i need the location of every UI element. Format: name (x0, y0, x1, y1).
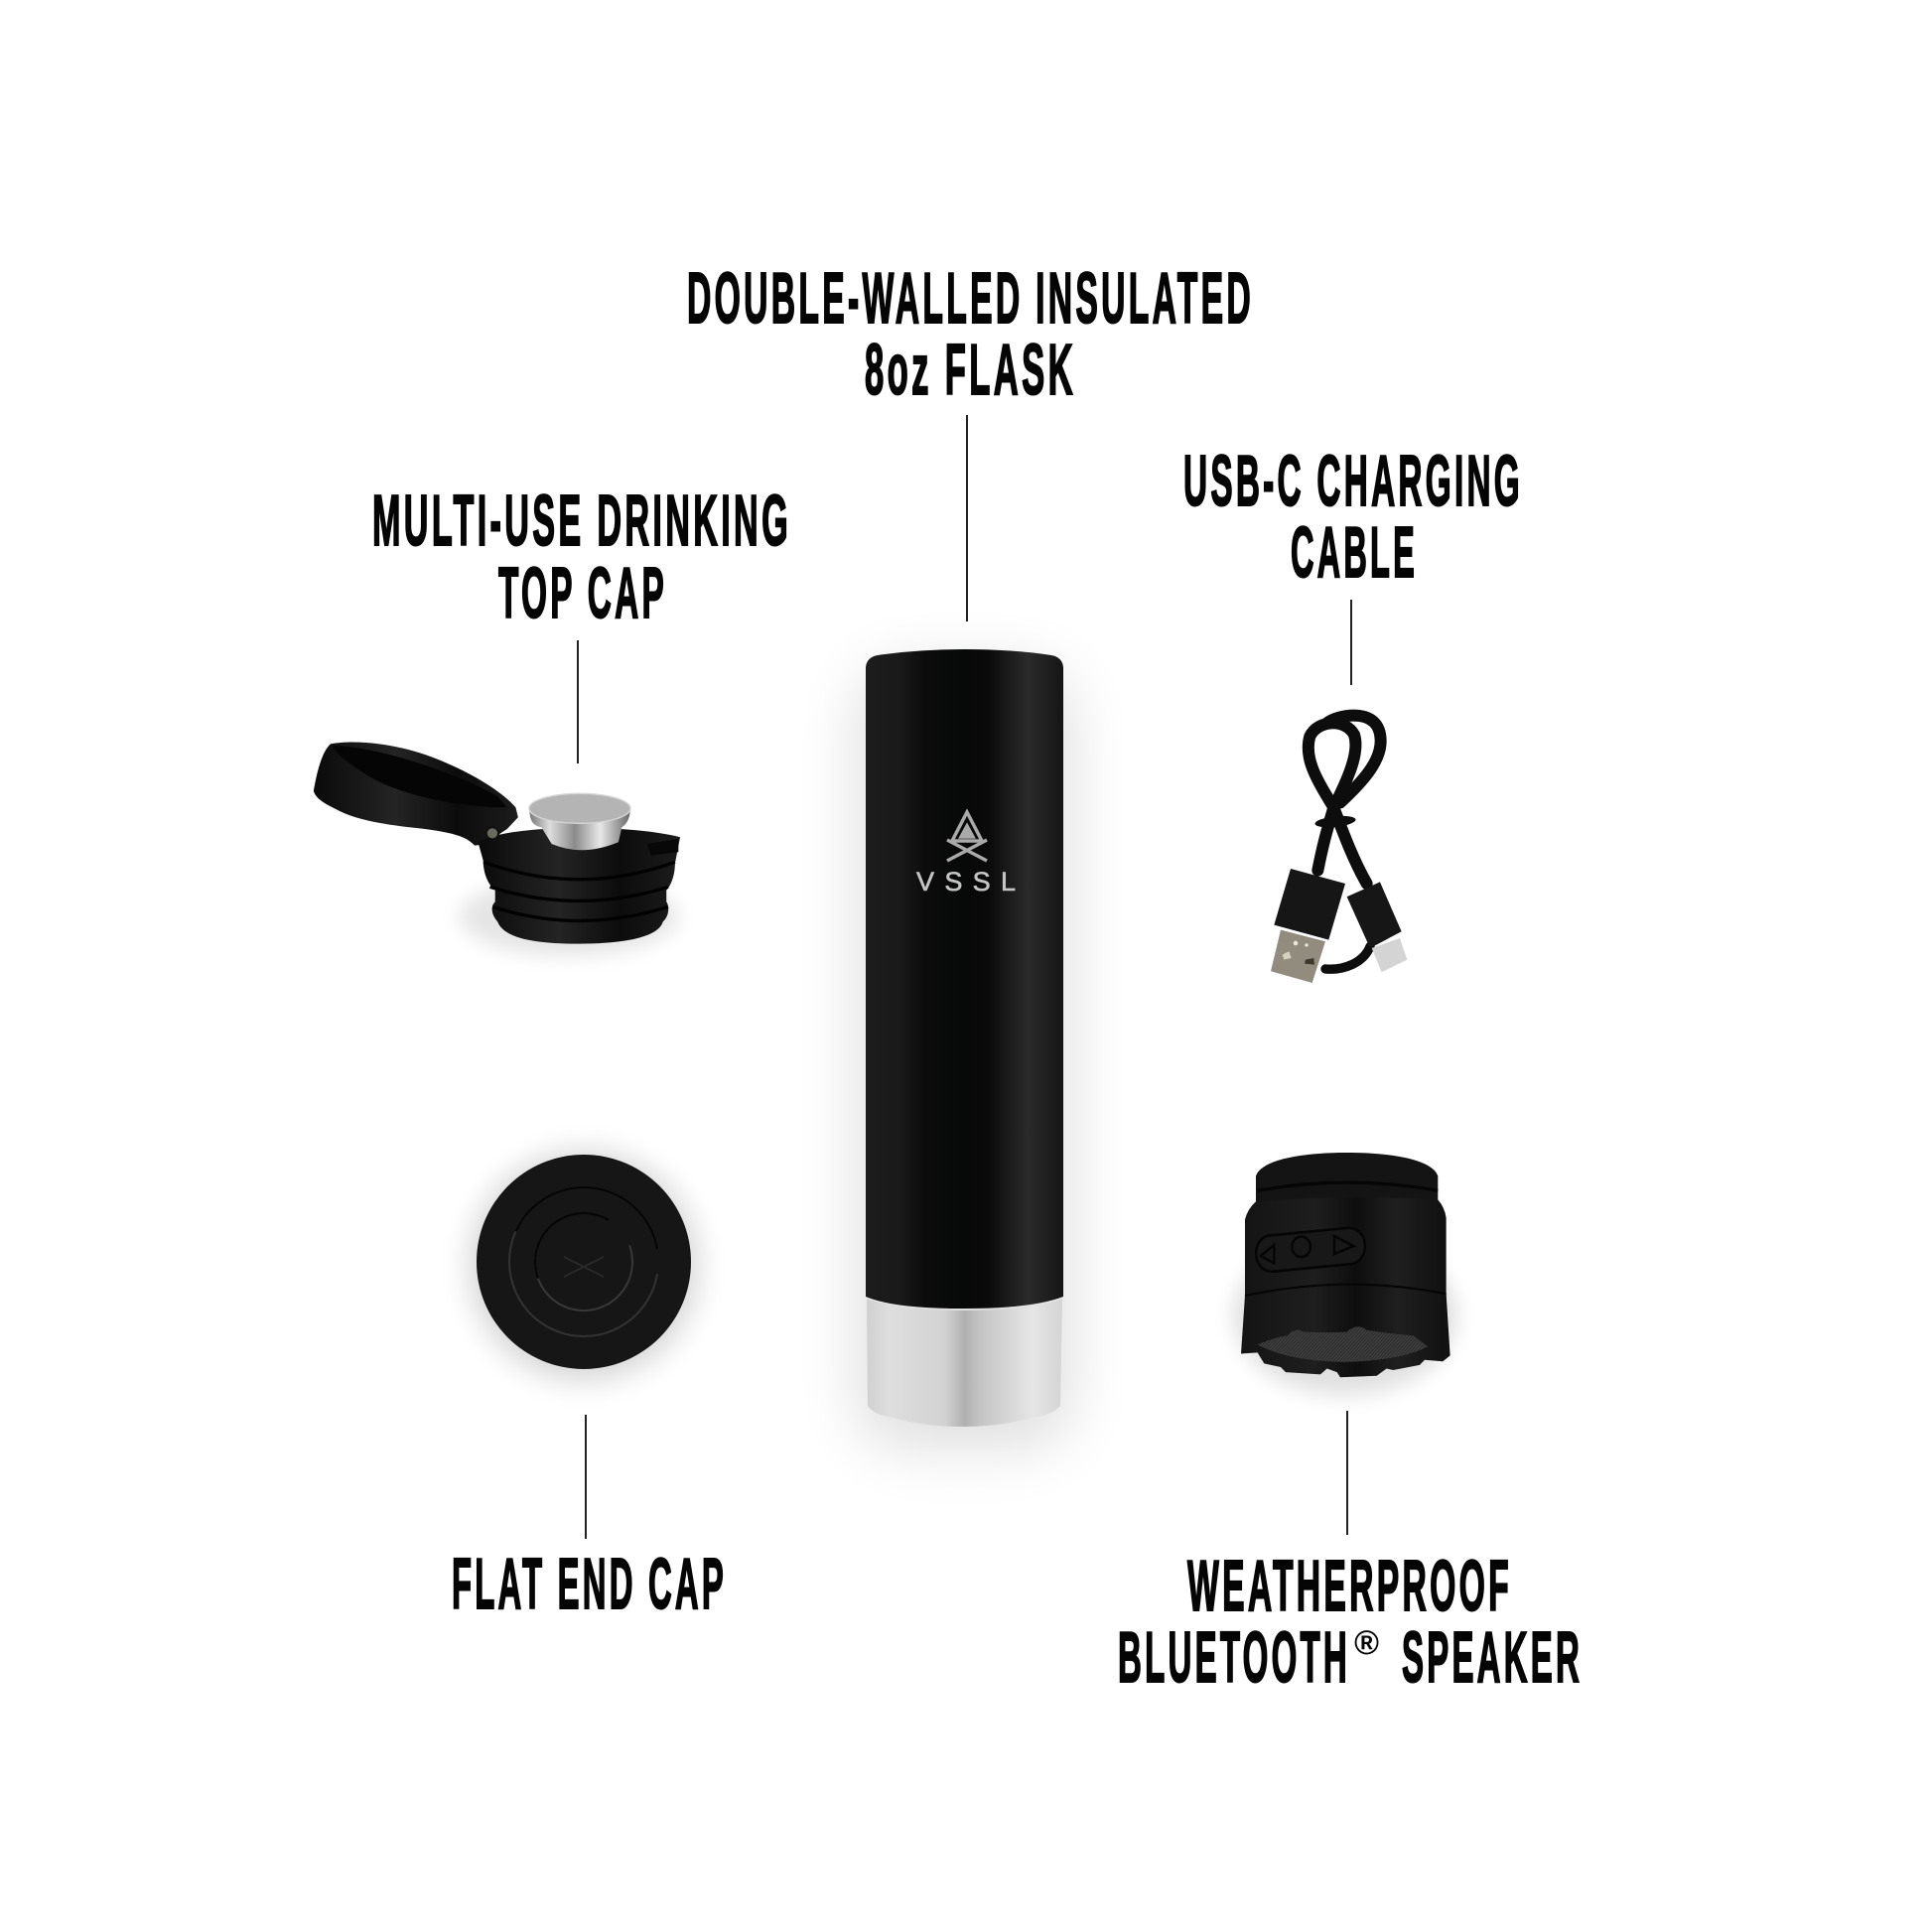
flask silver base (867, 1299, 1062, 1427)
text: FLAT END CAP (452, 1545, 727, 1624)
open lid (314, 742, 518, 846)
band seam (1245, 1285, 1447, 1296)
text: USB-C CHARGING (1183, 442, 1523, 521)
USB-A metal (1271, 930, 1325, 983)
label: multi-use drinking top cap (372, 482, 791, 633)
leader line: speaker (1346, 1411, 1348, 1535)
logo flame mark (947, 812, 987, 861)
VSSL logo (916, 812, 1016, 897)
collar groove (1258, 1182, 1438, 1190)
end cap rings (484, 1163, 683, 1361)
speaker grille (1258, 1326, 1428, 1362)
speaker lower band (1241, 1285, 1450, 1377)
leader line: end cap (585, 1415, 587, 1539)
speaker button panel (1255, 1226, 1366, 1273)
label: weatherproof bluetooth speaker: WEATHERPROOF (1187, 1547, 1512, 1626)
USB-A boot (1274, 869, 1345, 940)
product: flat end cap (469, 1151, 699, 1381)
label: weatherproof bluetooth speaker: ® (1354, 1624, 1379, 1662)
latch tab (647, 839, 678, 856)
base ridges (483, 862, 675, 920)
lid opening (333, 747, 507, 807)
label: double-walled insulated 8oz flask: 8oz FLASK (865, 331, 1076, 410)
USB-C boot (1347, 882, 1402, 948)
speaker shadow (1233, 1236, 1457, 1396)
product: USB-C cable (1271, 716, 1407, 983)
hinge pin (486, 827, 498, 839)
cap shadow (459, 877, 678, 956)
label: USB-C charging cable: CABLE (1291, 513, 1418, 593)
USB-A contacts (1283, 941, 1314, 965)
silver button (529, 807, 630, 850)
text: MULTI-USE DRINKING (372, 482, 791, 561)
label: weatherproof bluetooth speaker: BLUETOOTH (1118, 1618, 1350, 1698)
product: bluetooth speaker (1233, 1153, 1457, 1396)
product: drinking top cap (314, 742, 680, 956)
leader line: top cap (577, 640, 579, 763)
end cap shadow (469, 1151, 699, 1381)
USB-C metal (1372, 938, 1407, 972)
threaded base (478, 828, 680, 944)
label: double-walled insulated 8oz flask (687, 259, 1254, 410)
cable wire (1309, 716, 1381, 969)
leader line: cable (1350, 600, 1352, 685)
product: flask (856, 649, 1072, 1449)
label: multi-use drinking top cap: TOP CAP (498, 554, 667, 633)
end cap disc (477, 1155, 691, 1369)
speaker collar (1256, 1153, 1438, 1214)
label: USB-C charging cable (1183, 442, 1523, 593)
text: DOUBLE-WALLED INSULATED (687, 259, 1254, 339)
flask black body (866, 649, 1063, 1309)
speaker main band (1245, 1197, 1447, 1302)
logo wordmark: VSSL (916, 867, 1016, 897)
cable tie (1314, 814, 1356, 829)
text: SPEAKER (1402, 1618, 1583, 1698)
label: weatherproof bluetooth speaker (1118, 1547, 1583, 1698)
silver button top (529, 793, 630, 823)
flask shadow (856, 665, 1072, 1449)
leader line: flask (966, 415, 968, 621)
